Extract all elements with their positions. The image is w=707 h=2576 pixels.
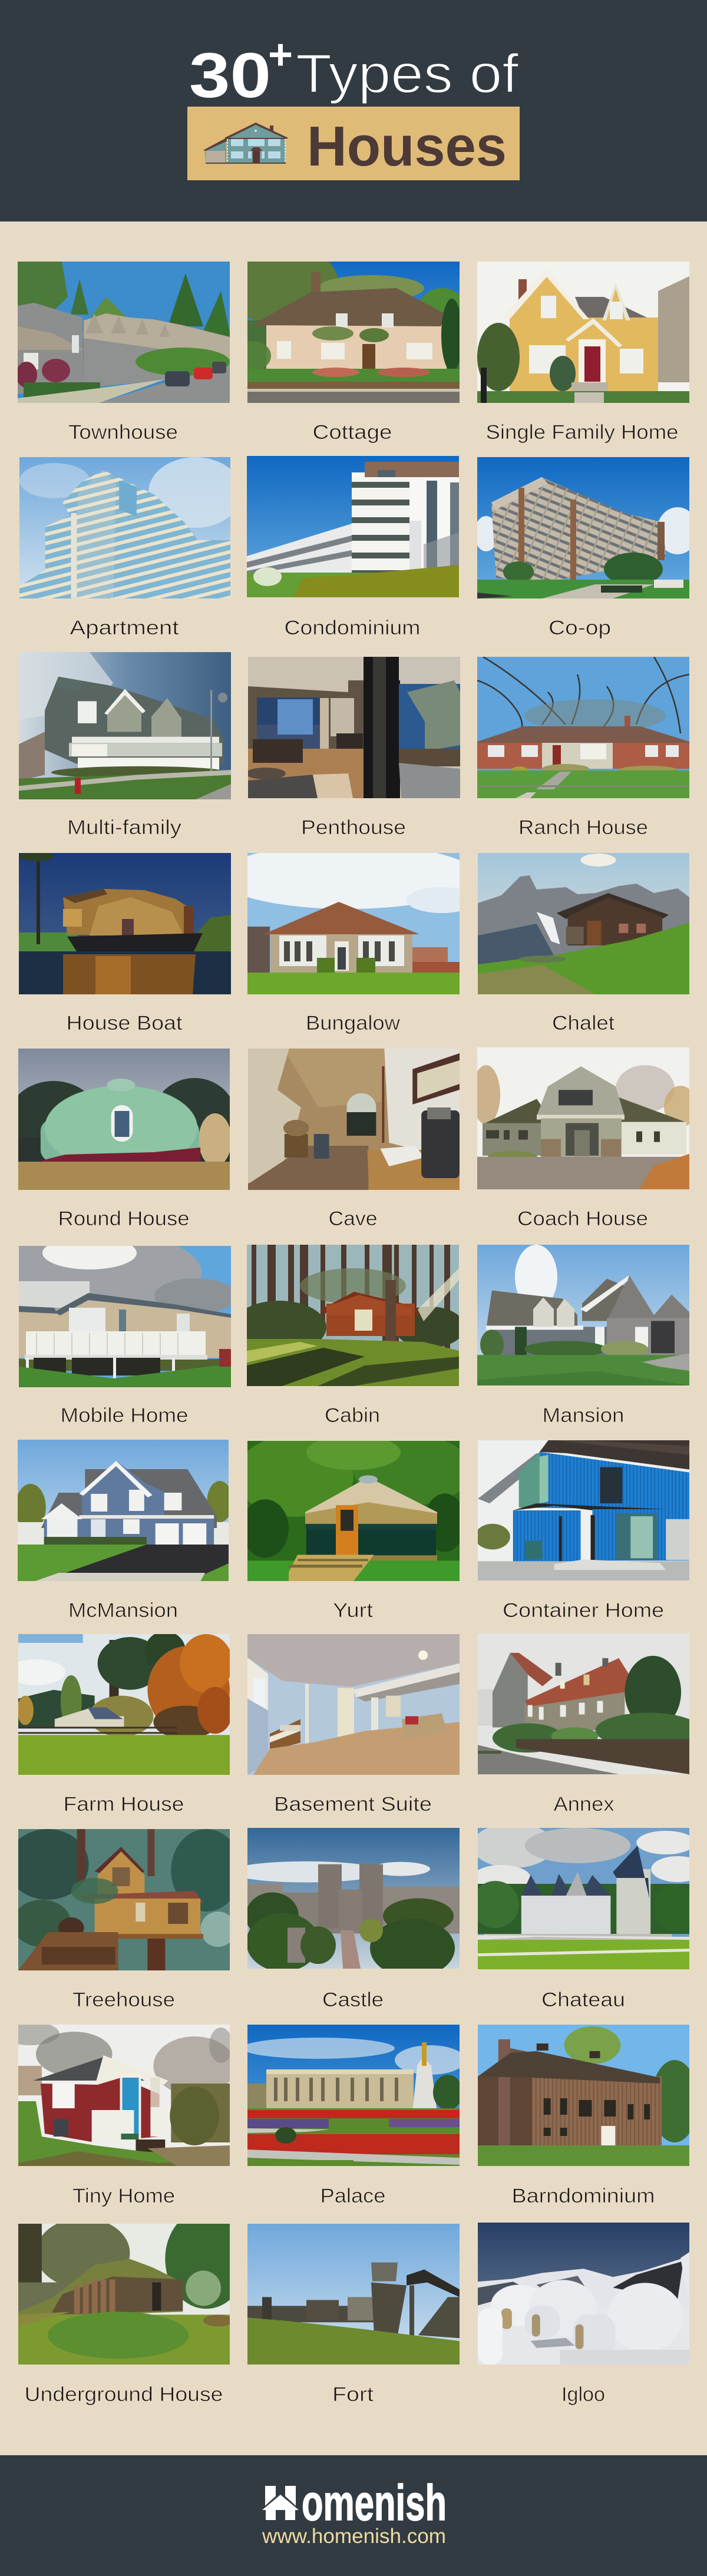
panel: Townhouse [16, 262, 231, 444]
photo: earth-sheltered house [18, 2224, 230, 2365]
header band [0, 0, 707, 221]
label: Bungalow: Bungalow [306, 1012, 400, 1034]
panel: Barndominium [472, 2025, 698, 2207]
photo: multi-family building [19, 652, 231, 799]
panel: Co-op [474, 457, 698, 639]
photo: apartment tower [19, 457, 230, 598]
photo: grey mansion [477, 1245, 689, 1385]
label: Tiny Home: Tiny Home [72, 2185, 175, 2207]
title words Types of: Types of [296, 43, 518, 104]
gold title box [187, 107, 520, 180]
panel: Tiny Home [1, 2022, 236, 2207]
label: Round House: Round House [58, 1208, 190, 1230]
panel: Container Home [475, 1440, 689, 1622]
label: Single Family Home: Single Family Home [485, 421, 679, 444]
photo: mobile home with deck [19, 1246, 231, 1387]
panel: Chateau [472, 1823, 704, 2011]
panel: Penthouse [246, 657, 460, 839]
photo: co-op apartment block [477, 457, 689, 598]
label: Annex: Annex [554, 1793, 614, 1816]
panel: Mobile Home [0, 1231, 237, 1427]
panel: Chalet [478, 853, 689, 1034]
label: Fort: Fort [332, 2383, 374, 2406]
website URL: www.homenish.com [262, 2525, 446, 2548]
label: Basement Suite: Basement Suite [274, 1793, 432, 1816]
label: Townhouse: Townhouse [68, 421, 178, 444]
label: Container Home: Container Home [503, 1599, 664, 1622]
label: Farm House: Farm House [64, 1793, 184, 1816]
panel: Igloo [478, 2223, 689, 2406]
label: Ranch House: Ranch House [518, 816, 648, 839]
label: Mobile Home: Mobile Home [60, 1404, 189, 1427]
label: Castle: Castle [322, 1989, 384, 2011]
logo: Homenish [260, 2475, 447, 2531]
panel: Apartment [19, 457, 242, 639]
photo: palace and flower beds [247, 2025, 460, 2166]
label: Cabin: Cabin [325, 1404, 380, 1427]
photo: red tiny home [18, 2025, 230, 2166]
photo: igloos in snow [478, 2223, 689, 2365]
panel: Yurt [236, 1435, 471, 1622]
panel: Cabin [232, 1245, 465, 1427]
panel: Single Family Home [477, 262, 689, 444]
panel: Underground House [18, 2209, 247, 2406]
label: Underground House: Underground House [25, 2383, 223, 2406]
title word Houses: Houses [307, 115, 507, 178]
photo: timber barn home [478, 2025, 689, 2166]
panel: Palace [242, 2025, 465, 2207]
label: Treehouse: Treehouse [72, 1989, 175, 2011]
panel: Cave [248, 1049, 460, 1230]
photo: chateau [478, 1828, 689, 1969]
photo: brick ranch house [477, 657, 689, 798]
photo: house boat [19, 853, 231, 994]
panel: Basement Suite [247, 1634, 460, 1816]
photo: forest cabin [247, 1245, 459, 1386]
title number 30: 30 [189, 39, 271, 111]
logo wordmark omenish: omenish [302, 2475, 447, 2531]
label: Chateau: Chateau [541, 1989, 625, 2011]
label: House Boat: House Boat [66, 1012, 183, 1034]
photo: blue suburban home [18, 1440, 229, 1581]
label: Mansion: Mansion [542, 1404, 625, 1427]
label: Penthouse: Penthouse [301, 816, 406, 839]
panel: Ranch House [477, 657, 689, 839]
photo: thatched cottage [247, 262, 460, 403]
photo: penthouse interior [248, 657, 460, 798]
photo: bungalow [247, 853, 460, 994]
panel: Mansion [477, 1245, 689, 1427]
photo: basement suite interior [247, 1634, 460, 1775]
photo: yurt in forest [247, 1441, 460, 1581]
panel: House Boat [19, 852, 231, 1034]
label: Yurt: Yurt [333, 1599, 374, 1622]
photo: concrete fort [247, 2224, 460, 2365]
photo: annex house [478, 1633, 689, 1774]
panel: McMansion [15, 1440, 233, 1622]
label: Barndominium: Barndominium [511, 2185, 655, 2207]
photo: cave home [248, 1049, 460, 1190]
photo: blue container home [478, 1440, 689, 1580]
panel: Castle [230, 1828, 460, 2011]
label: Chalet: Chalet [552, 1012, 615, 1034]
label: Cave: Cave [329, 1208, 377, 1230]
photo: white condominium [247, 456, 459, 597]
icon: house [203, 123, 288, 164]
photo: dome house [18, 1049, 230, 1190]
panel: Bungalow [218, 844, 477, 1034]
panel: Fort [247, 2224, 460, 2406]
panel: Multi-family [19, 652, 231, 839]
panel: Farm House [6, 1631, 233, 1816]
panel: Cottage [227, 244, 465, 444]
panel: Condominium [247, 456, 459, 639]
label: Co-op: Co-op [549, 617, 611, 639]
label: Igloo: Igloo [561, 2383, 605, 2406]
panel: Treehouse [6, 1829, 242, 2011]
photo: treehouse [18, 1829, 230, 1970]
photo: chalet and mountains [478, 853, 689, 994]
label: Palace: Palace [321, 2185, 385, 2207]
panel: Coach House [472, 1047, 697, 1230]
photo: castle [247, 1828, 460, 1969]
label: Cottage: Cottage [312, 421, 392, 444]
label: Coach House: Coach House [517, 1208, 648, 1230]
title plus sign: + [268, 31, 293, 78]
label: Apartment: Apartment [70, 617, 179, 639]
panel: Annex [478, 1633, 701, 1816]
photo: townhouse row [18, 262, 230, 403]
title: 30+ Types of Houses [187, 31, 520, 180]
photo: coach house [477, 1047, 689, 1189]
logo letter H with house: H [265, 2478, 296, 2530]
footer band [0, 2455, 707, 2576]
label: McMansion: McMansion [68, 1599, 178, 1622]
panel: Round House [6, 1049, 236, 1230]
label: Condominium: Condominium [284, 617, 421, 639]
label: Multi-family: Multi-family [67, 816, 181, 839]
photo: farm house and autumn trees [18, 1634, 230, 1775]
photo: yellow house [477, 262, 689, 403]
